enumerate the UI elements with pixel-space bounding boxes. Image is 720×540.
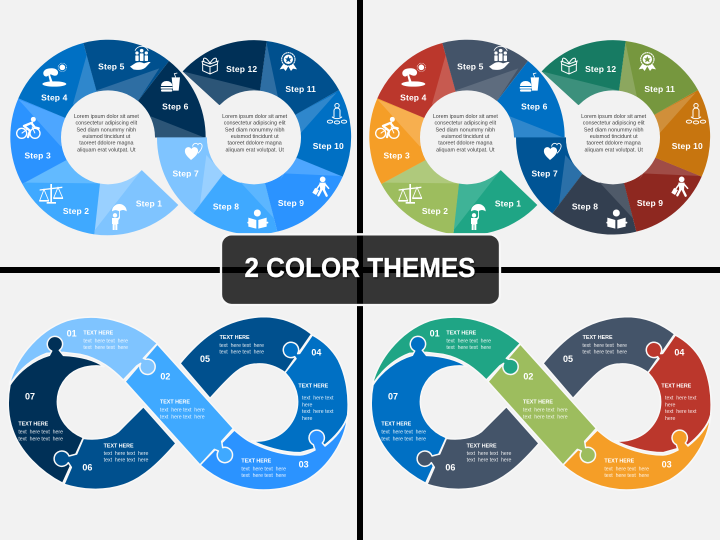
left hole text — [420, 90, 514, 184]
segment 01 text — [67, 329, 128, 351]
segment 01 text — [430, 329, 491, 351]
step 10: Step 10 — [313, 141, 344, 151]
step 4 — [377, 43, 456, 118]
step 9: Step 9 — [637, 198, 663, 208]
segment 03 text: text here text here — [241, 473, 286, 479]
segment 06 text: text here text here — [467, 451, 511, 457]
step 10: Step 10 — [672, 141, 703, 151]
right hole text: Sed diam nonummy nibh — [225, 128, 284, 134]
segment 05 text: TEXT HERE — [583, 335, 613, 341]
step 5: Step 5 — [457, 62, 484, 72]
right hole text: consectetur adipiscing elit — [583, 121, 645, 127]
step 1 — [453, 170, 537, 235]
step 9: Step 9 — [278, 198, 304, 208]
segment 01 text: TEXT HERE — [446, 330, 477, 336]
right hole text: euismod tincidunt ut — [590, 134, 638, 140]
segment 07 text: text here text here — [381, 436, 426, 442]
step 2 — [381, 160, 459, 234]
segment 02 text — [160, 372, 205, 420]
step 7: Step 7 — [532, 168, 558, 178]
segment 06 text: TEXT HERE — [104, 443, 134, 449]
segment 04 text: text here text — [665, 395, 697, 401]
left hole text: Lorem ipsum dolor sit amet — [433, 114, 498, 120]
segment 01 text: 01 — [430, 329, 440, 339]
right hole text — [207, 90, 301, 184]
segment 07 text — [18, 392, 63, 442]
segment 06 text: 06 — [445, 463, 455, 473]
step 9 — [624, 158, 702, 232]
segment 02 text: text here text here — [160, 408, 205, 414]
left hole text: taoreet ddolore magna — [438, 141, 492, 147]
segment 02 text: 02 — [160, 372, 170, 382]
step 12: Step 12 — [585, 64, 616, 74]
segment 07 text: text here text here — [18, 429, 63, 435]
segment 01 text: text here text here — [83, 338, 128, 344]
step 2: Step 2 — [63, 206, 89, 216]
step 6 — [497, 61, 565, 137]
left hole text: aliquam erat volutpat. Ut — [77, 148, 136, 154]
segment 01 text: text here text here — [446, 338, 491, 344]
step 1: Step 1 — [136, 198, 162, 208]
right hole text: euismod tincidunt ut — [231, 134, 279, 140]
step 2 — [22, 160, 100, 234]
segment 05 text: 05 — [200, 354, 210, 364]
right hole text: Lorem ipsum dolor sit amet — [581, 114, 647, 120]
step 1 — [94, 170, 178, 235]
panel: blue spiral infinity with 12 steps — [10, 40, 351, 235]
segment 06 text: text here text here — [104, 458, 148, 464]
step 11 — [619, 41, 698, 115]
segment 03 text: 03 — [299, 460, 309, 470]
segment 07 text: TEXT HERE — [381, 421, 412, 427]
segment 04 text: here — [665, 402, 675, 408]
right hole text: Lorem ipsum dolor sit amet — [222, 114, 288, 120]
segment 03 text — [241, 458, 309, 479]
left hole text: Sed diam nonummy nibh — [77, 128, 136, 134]
segment 02 text: 02 — [523, 372, 533, 382]
left hole text: taoreet ddolore magna — [79, 141, 133, 147]
segment 06 text: TEXT HERE — [467, 443, 497, 449]
step 12 — [183, 40, 267, 105]
segment 05 text — [563, 335, 627, 364]
segment 02 text — [523, 372, 568, 420]
step 7 — [157, 137, 223, 213]
step 5 — [83, 40, 169, 101]
segment 07 text: 07 — [388, 392, 398, 402]
segment 03 text: text here text here — [604, 473, 649, 479]
segment 06 text: text here text here — [104, 451, 148, 457]
segment 02 text: text here text here — [523, 408, 568, 414]
segment 07 text: TEXT HERE — [18, 421, 49, 427]
step 10 — [654, 90, 710, 177]
segment 04 text: text here text — [302, 395, 334, 401]
segment 02 text: text here text here — [160, 414, 205, 420]
step 12 — [542, 40, 626, 105]
segment 02 text: TEXT HERE — [523, 399, 553, 405]
segment 04 text: text here text — [665, 409, 697, 415]
segment 06 text: 06 — [82, 463, 92, 473]
segment 04 text: TEXT HERE — [661, 384, 692, 390]
left hole text: euismod tincidunt ut — [82, 134, 131, 140]
step 6: Step 6 — [162, 102, 189, 112]
segment 05 text: text here text here — [582, 343, 627, 349]
right hole text: taoreet ddolore magna — [587, 141, 641, 147]
segment 05 text: 05 — [563, 354, 573, 364]
segment 04 text: 04 — [674, 348, 684, 358]
segment 02 text: TEXT HERE — [160, 399, 190, 405]
step 3 — [10, 98, 67, 184]
segment 07 text: text here text here — [18, 436, 63, 442]
title banner: 2 COLOR THEMES — [244, 252, 476, 283]
step 8: Step 8 — [572, 202, 598, 212]
puzzle shapes — [8, 317, 348, 490]
left hole text: euismod tincidunt ut — [441, 134, 490, 140]
segment 05 text: text here text here — [582, 350, 627, 356]
segment 03 text: TEXT HERE — [604, 458, 635, 464]
segment 03 text — [604, 458, 672, 479]
step 12: Step 12 — [226, 64, 257, 74]
left hole text: Sed diam nonummy nibh — [436, 128, 495, 134]
segment 01 text: TEXT HERE — [83, 330, 114, 336]
segment 03 text: text here text here — [604, 466, 649, 472]
right hole text: consectetur adipiscing elit — [224, 121, 286, 127]
step 7 — [516, 137, 582, 213]
step 9 — [265, 158, 343, 232]
segment 01 text: text here text here — [83, 345, 128, 351]
step 7: Step 7 — [173, 168, 199, 178]
segment 04 text: 04 — [311, 348, 321, 358]
segment 03 text: TEXT HERE — [241, 458, 272, 464]
step 11 — [260, 41, 339, 115]
segment 06 text: text here text here — [467, 458, 511, 464]
segment 05 text: TEXT HERE — [220, 335, 250, 341]
panel: multicolor puzzle infinity — [371, 317, 711, 490]
right hole text — [566, 90, 660, 184]
segment 04 text — [661, 348, 697, 422]
step 11: Step 11 — [644, 84, 675, 94]
segment 04 text: here — [302, 416, 312, 422]
left hole text: consectetur adipiscing elit — [434, 121, 497, 127]
step 5: Step 5 — [98, 62, 125, 72]
panel: blue puzzle infinity — [8, 317, 348, 490]
step 1: Step 1 — [495, 198, 521, 208]
step 8: Step 8 — [213, 202, 239, 212]
step 4: Step 4 — [400, 93, 427, 103]
step 8 — [552, 174, 636, 235]
segment 01 text: 01 — [67, 329, 77, 339]
step 4 — [18, 43, 97, 118]
step 4: Step 4 — [41, 93, 68, 103]
left hole text: Lorem ipsum dolor sit amet — [74, 114, 139, 120]
step 3: Step 3 — [384, 151, 410, 161]
segment 05 text — [200, 335, 264, 364]
step 6 — [138, 61, 206, 137]
step 3 — [369, 98, 426, 184]
segment 04 text: text here text — [302, 409, 334, 415]
step 2: Step 2 — [422, 206, 448, 216]
segment 06 text — [445, 443, 511, 473]
segment 01 text: text here text here — [446, 345, 491, 351]
right hole text: aliquam erat volutpat. Ut — [225, 148, 284, 154]
puzzle shapes — [371, 317, 711, 490]
segment 07 text — [381, 392, 426, 442]
step 11: Step 11 — [285, 84, 316, 94]
panel: multicolor spiral infinity with 12 steps — [369, 40, 710, 235]
segment 07 text: text here text here — [381, 429, 426, 435]
left hole text: aliquam erat volutpat. Ut — [436, 148, 495, 154]
segment 04 text: here — [302, 402, 312, 408]
title banner — [221, 234, 500, 305]
left hole text — [61, 90, 155, 184]
step 5 — [442, 40, 528, 101]
segment 03 text: 03 — [662, 460, 672, 470]
right hole text: taoreet ddolore magna — [228, 141, 282, 147]
step 8 — [193, 174, 277, 235]
segment 03 text: text here text here — [241, 466, 286, 472]
segment 05 text: text here text here — [219, 350, 264, 356]
segment 04 text — [298, 348, 334, 422]
right hole text: aliquam erat volutpat. Ut — [584, 148, 643, 154]
segment 02 text: text here text here — [523, 414, 568, 420]
segment 05 text: text here text here — [219, 343, 264, 349]
step 10 — [295, 90, 351, 177]
segment 04 text: TEXT HERE — [298, 384, 329, 390]
left hole text: consectetur adipiscing elit — [75, 121, 138, 127]
segment 07 text: 07 — [25, 392, 35, 402]
right hole text: Sed diam nonummy nibh — [584, 128, 643, 134]
segment 04 text: here — [665, 416, 675, 422]
segment 06 text — [82, 443, 148, 473]
step 6: Step 6 — [521, 102, 548, 112]
step 3: Step 3 — [25, 151, 51, 161]
